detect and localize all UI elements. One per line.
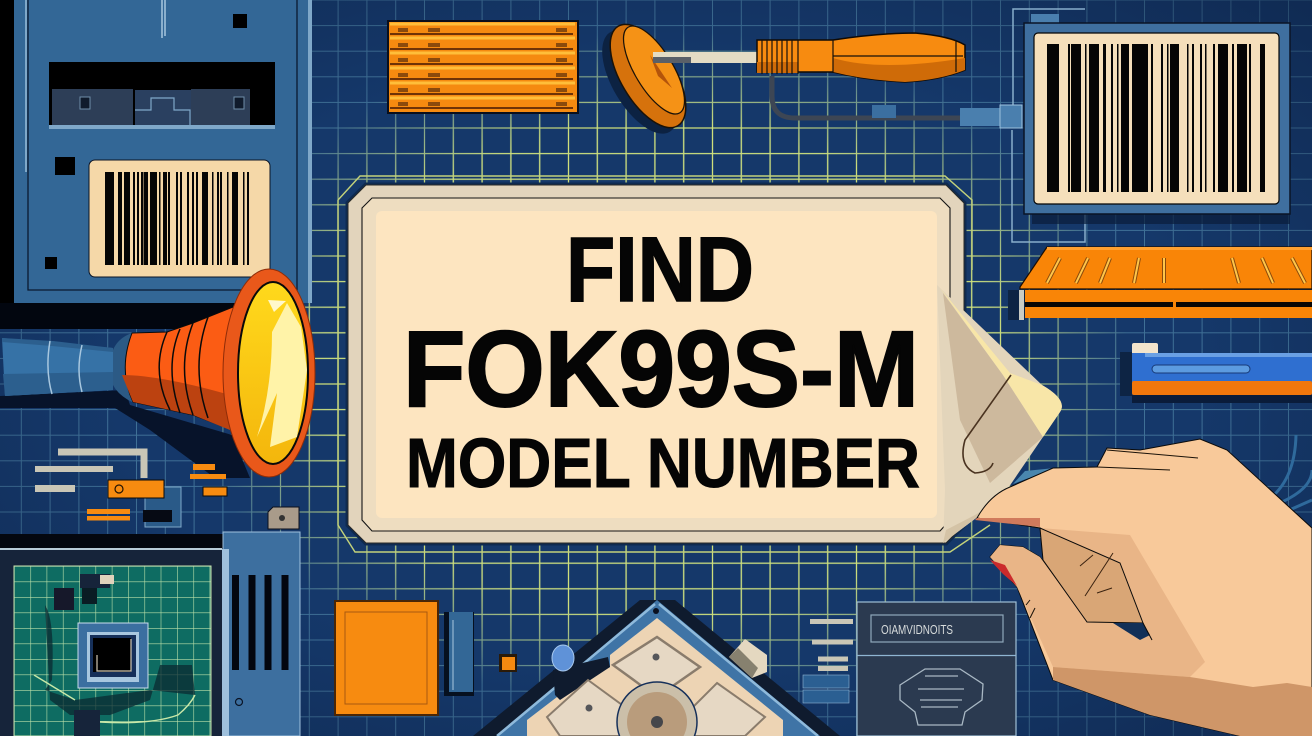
wire frame top right xyxy=(1012,9,1085,242)
horn cone xyxy=(125,307,233,430)
icon: orange plate xyxy=(388,21,578,113)
icon: small circuit parts xyxy=(35,452,299,529)
device slot xyxy=(49,62,275,129)
heading: model code: FOK99S-M xyxy=(403,308,919,429)
panel: barcode top right xyxy=(960,14,1290,224)
small side modules xyxy=(803,675,849,703)
blue wires behind hand xyxy=(1268,435,1312,512)
panel: circuit board xyxy=(0,532,300,736)
icon: hand xyxy=(975,439,1312,736)
screwdriver disc xyxy=(595,12,701,140)
screwdriver handle xyxy=(757,33,965,82)
icon: blue slider xyxy=(1120,343,1312,403)
icon: magnifier horn xyxy=(0,269,315,478)
panel: dark manual xyxy=(857,602,1016,736)
circuit outline around label xyxy=(338,176,990,552)
heading: model number: MODEL NUMBER xyxy=(406,424,920,502)
device plates xyxy=(547,637,765,736)
icon: orange connector xyxy=(1008,247,1312,320)
manual label text: OIAMVIDNOITS xyxy=(881,622,953,637)
manual icon xyxy=(900,669,983,725)
icon: diamond device xyxy=(473,600,840,736)
finger underside xyxy=(975,518,1040,527)
hand silhouette xyxy=(977,439,1312,736)
heading: find: FIND xyxy=(566,219,754,321)
panel: title label xyxy=(348,185,964,543)
small side bars xyxy=(810,622,853,668)
icon: screwdriver xyxy=(587,12,965,146)
icon: orange chip xyxy=(335,601,517,715)
horn rim xyxy=(223,269,315,477)
horn handle xyxy=(2,338,113,396)
board chip xyxy=(78,623,148,688)
panel: device top left xyxy=(0,0,312,329)
barcode: device label xyxy=(89,160,270,277)
icon: peeled corner xyxy=(937,285,1062,543)
palm shading xyxy=(1040,528,1143,623)
red fingernail xyxy=(990,560,1017,586)
hand shadow region xyxy=(990,528,1205,677)
